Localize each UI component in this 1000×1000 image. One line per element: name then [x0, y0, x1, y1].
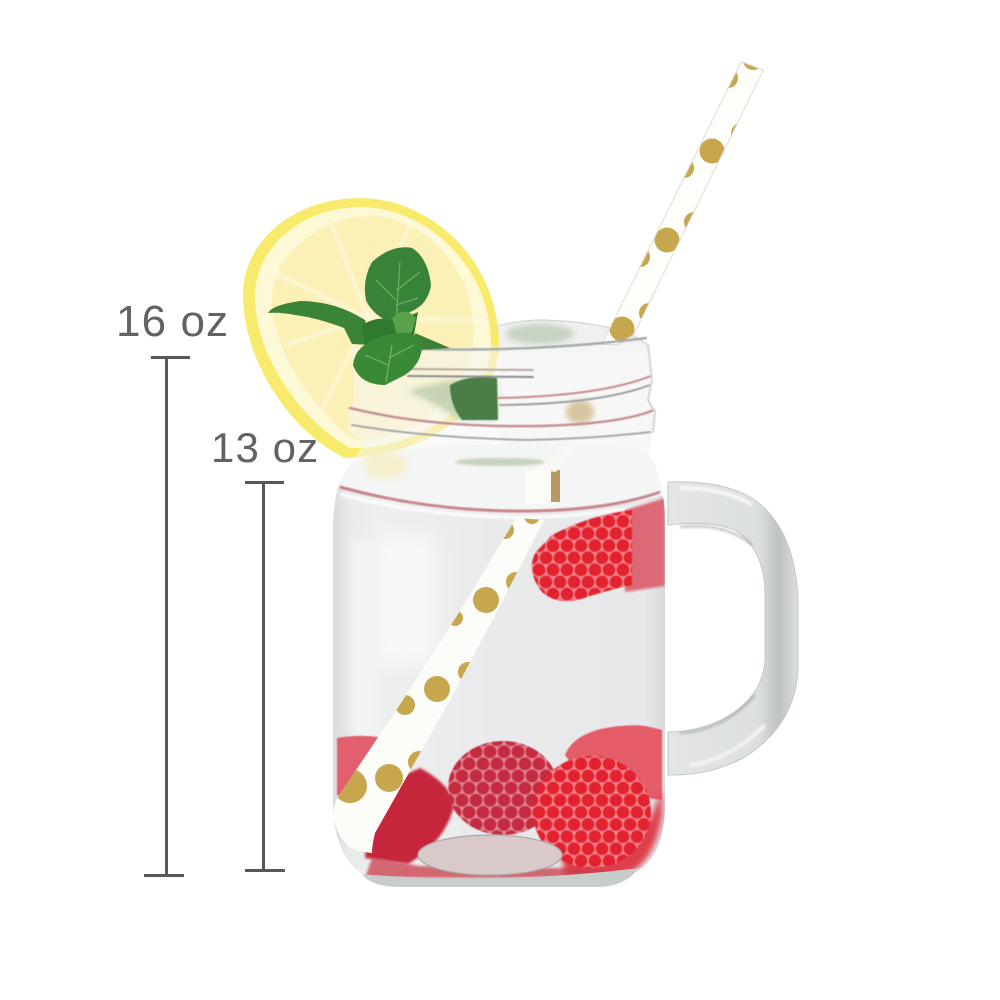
label: 16 oz: 16 oz — [116, 297, 229, 346]
raspberry: lower left pale — [336, 735, 378, 796]
raspberry: lower right front — [533, 756, 651, 868]
lemon slice — [243, 198, 499, 458]
straw: lower part in water — [333, 518, 544, 853]
mason jar — [333, 338, 798, 892]
mint leaf left — [268, 301, 372, 345]
jar handle — [668, 482, 798, 775]
water line — [340, 487, 660, 511]
straw: refracted section above water — [526, 445, 575, 504]
label: 13 oz: 13 oz — [211, 424, 319, 471]
raspberry glow at base — [560, 790, 662, 878]
raspberry: lower middle — [448, 741, 558, 835]
jar base — [365, 858, 640, 878]
measure bar: 16 oz — [144, 356, 190, 877]
raspberry: lower right back — [565, 725, 662, 800]
jar back rim — [470, 320, 648, 352]
mint stem leaf right — [415, 333, 450, 350]
neck lines — [350, 338, 655, 440]
jar body with water — [333, 444, 665, 887]
measure bar: 13 oz — [245, 481, 285, 872]
mint leaf centre — [362, 312, 418, 348]
jar neck — [346, 338, 655, 470]
soft reflections — [386, 542, 430, 658]
mint sprig — [268, 247, 450, 385]
raspberry: upper — [532, 510, 632, 601]
mint leaf bottom — [353, 333, 422, 385]
jar shoulder above water — [340, 444, 663, 509]
mint reflection — [408, 378, 497, 420]
mint leaf top — [365, 247, 431, 325]
straw: upper part — [601, 61, 764, 345]
raspberry: lower left dark — [365, 768, 454, 864]
lemon segment lines — [273, 225, 476, 410]
raspberry: upper reflection — [625, 498, 665, 592]
